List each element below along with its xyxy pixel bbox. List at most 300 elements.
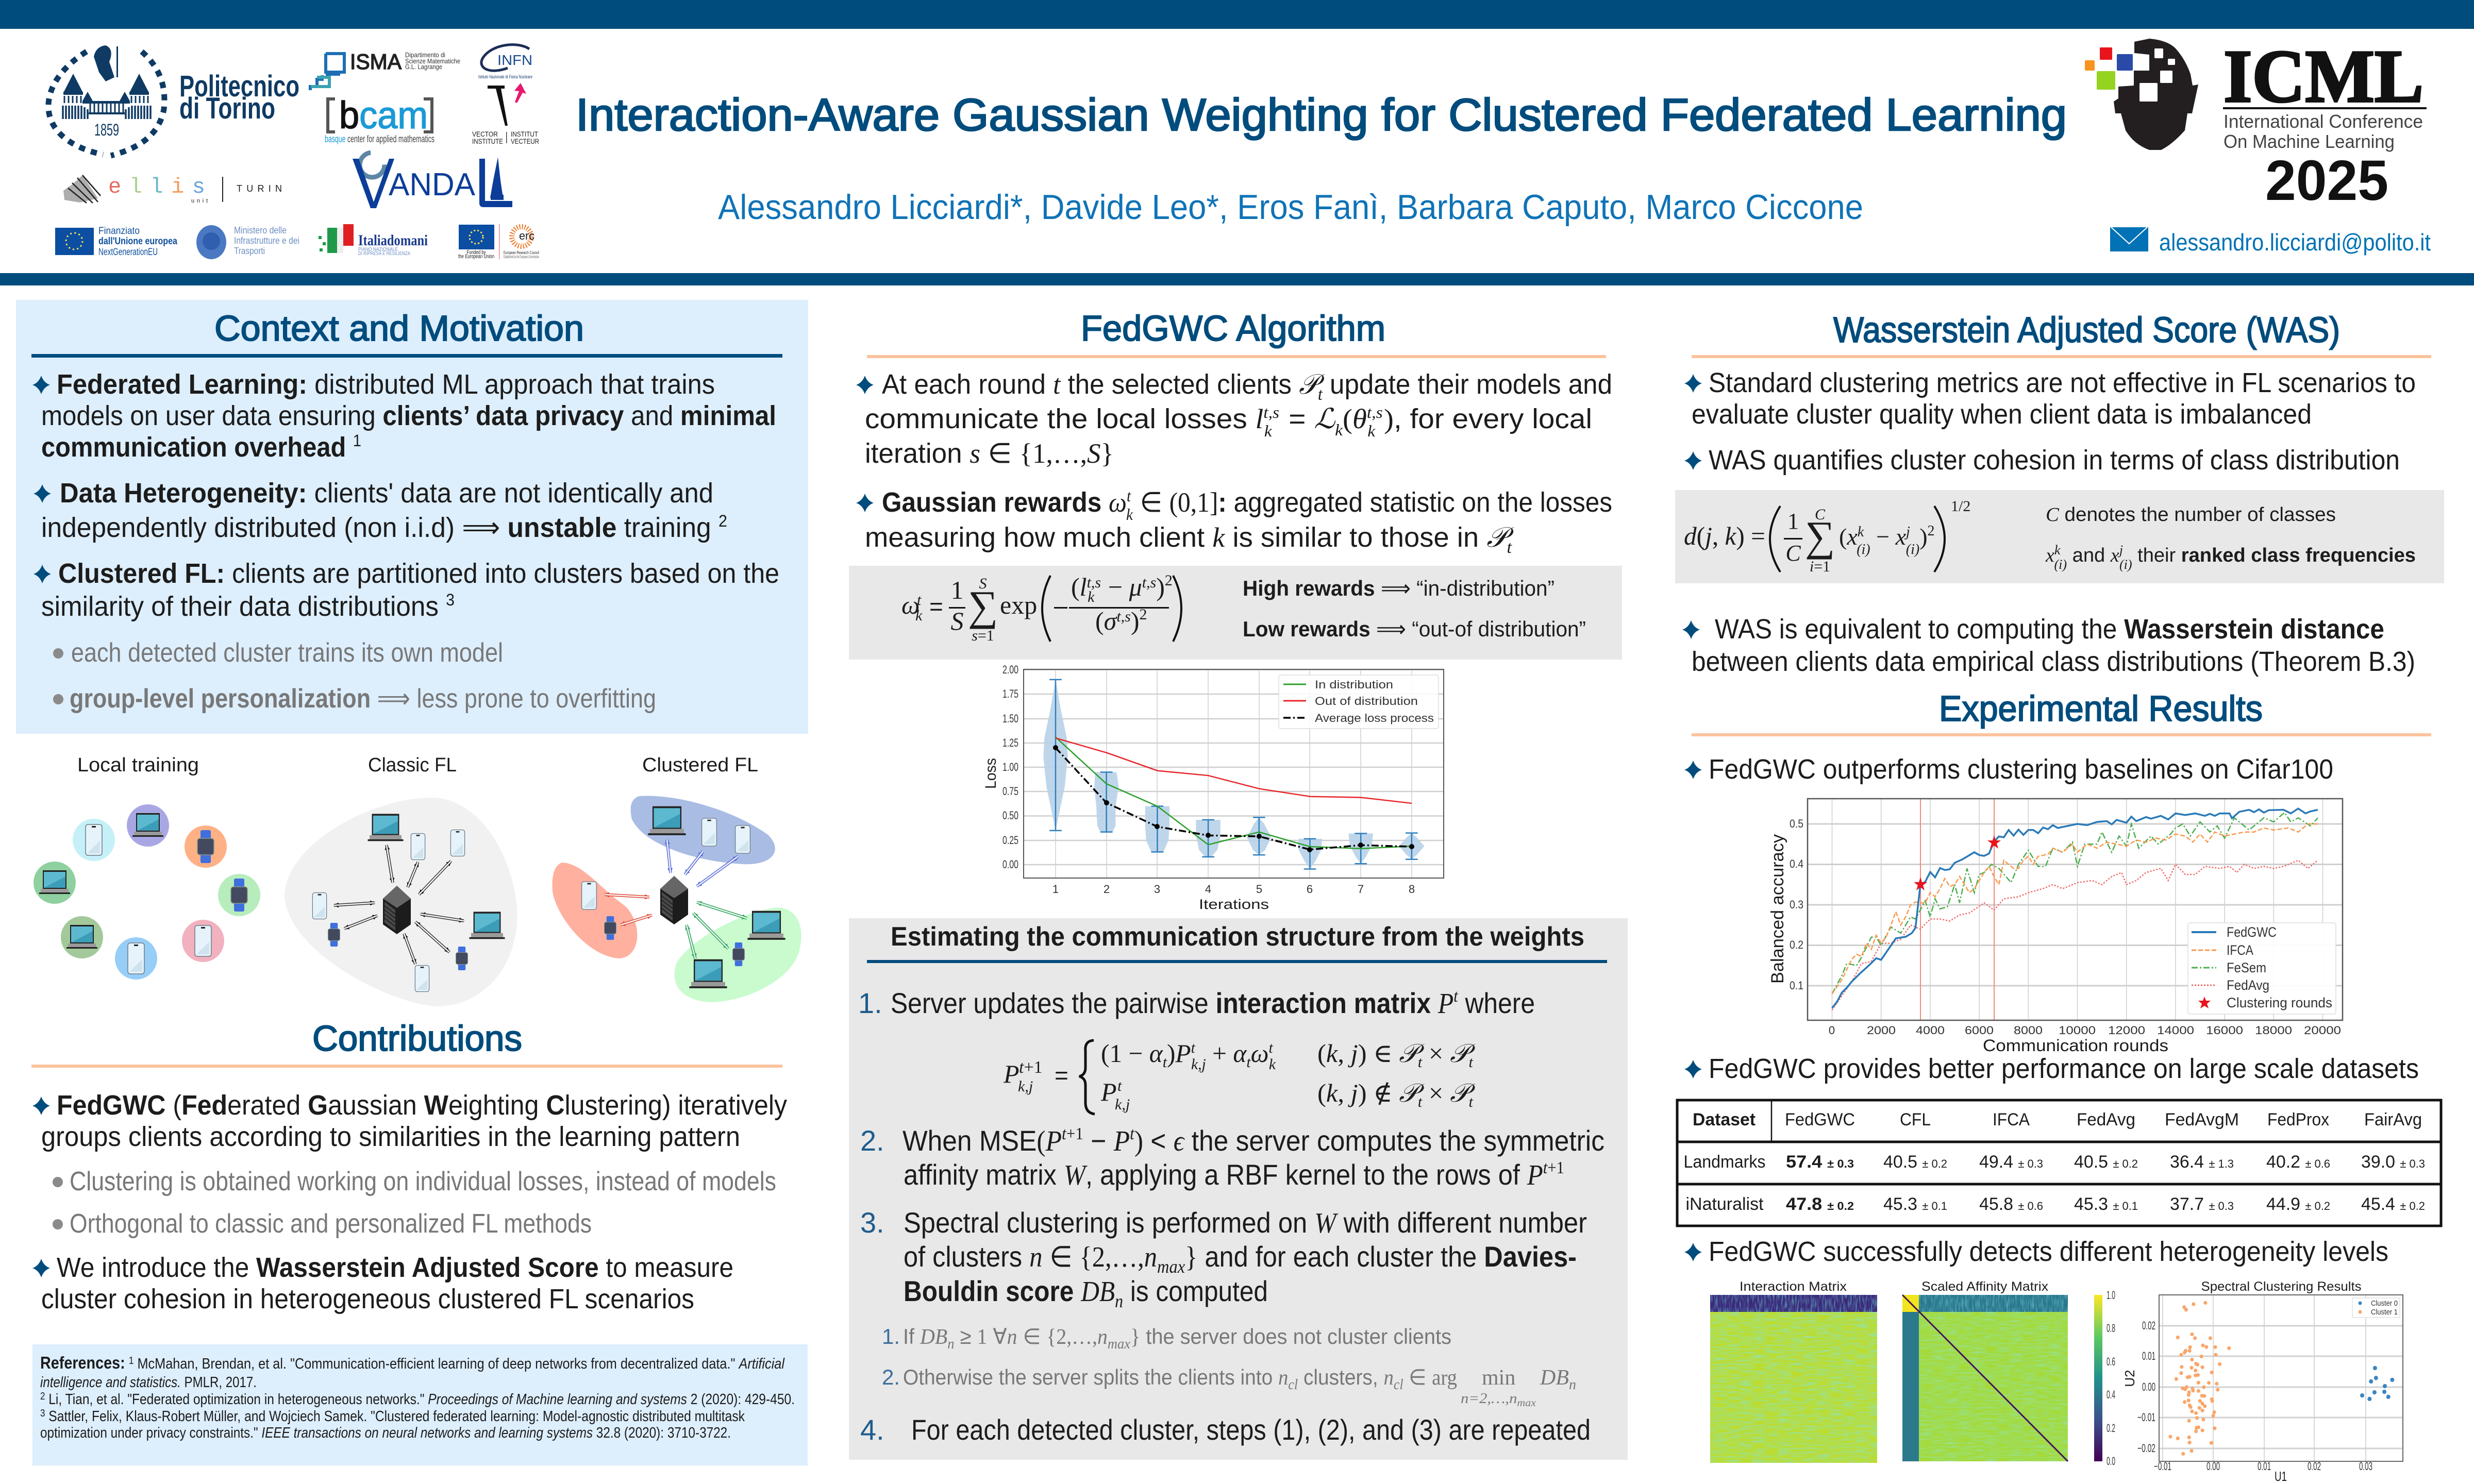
heading: Context and Motivation: Context and Motivation bbox=[214, 308, 584, 348]
chart: loss over iterations: 0.50 bbox=[1002, 809, 1018, 822]
step 2: P bbox=[1113, 1125, 1130, 1157]
chart: balanced accuracy: 2000 bbox=[1867, 1024, 1896, 1037]
chart: spectral clustering results: 0.00 bbox=[2142, 1380, 2155, 1393]
chart: loss over iterations: 1 bbox=[1052, 883, 1059, 896]
panel: references: Sattler, Felix, Klaus-Robert Müller, and Wojciech Samek. "Clustered federated learning: Model-agnostic distributed multitask bbox=[45, 1408, 745, 1425]
step 3: of clusters n ∈ {2,…,n bbox=[904, 1240, 1159, 1273]
formula: interaction matrix update: t bbox=[1117, 1077, 1122, 1094]
text: Data Heterogeneity: 2 bbox=[718, 512, 727, 530]
formula: interaction matrix update: t bbox=[1163, 1054, 1167, 1071]
logo: DISMA: ISMA bbox=[350, 49, 402, 74]
formula: interaction matrix update: k,j bbox=[1115, 1096, 1130, 1113]
formula: interaction matrix update: α bbox=[1233, 1039, 1247, 1068]
text: FedGWC algorithm bullets: t,s bbox=[1367, 403, 1383, 421]
header row: FairAvg bbox=[2364, 1110, 2422, 1129]
chart: balanced accuracy: 8000 bbox=[2014, 1024, 2043, 1037]
sub-step 2: max bbox=[1517, 1397, 1536, 1409]
step 3: Bouldin score DB bbox=[904, 1275, 1119, 1308]
logo: ellis unit Turin: e l l i s bbox=[108, 175, 205, 199]
row: Landmarks: Landmarks bbox=[1683, 1152, 1766, 1172]
formula: omega bbox=[901, 572, 1181, 644]
formula: omega: S bbox=[950, 606, 964, 635]
diagram: Local training: Local training bbox=[77, 754, 199, 776]
formula: d(j,k) bbox=[1684, 498, 1970, 575]
text: FedGWC algorithm bullets: measuring how much client k is similar to those in 𝒫 bbox=[865, 522, 1507, 553]
formula: interaction matrix update: t bbox=[1469, 1054, 1474, 1071]
sub-step 1 bbox=[882, 1324, 1451, 1352]
formula: d(j,k): k bbox=[1858, 524, 1864, 540]
legend: IFCA bbox=[2227, 942, 2253, 958]
formula: interaction matrix update: (k, j) ∉ 𝒫 bbox=[1317, 1078, 1417, 1107]
row: Landmarks: 40.5 ± 0.2 bbox=[2074, 1152, 2138, 1172]
chart: interaction matrix: Interaction Matrix bbox=[1740, 1279, 1847, 1294]
text: High rewards: High rewards ⟹ “in-distribution” bbox=[1243, 576, 1554, 600]
text: FedGWC algorithm bullets: (0,1]: aggregated statistic on the losses bbox=[1169, 487, 1647, 518]
chart: spectral clustering results: −0.02 bbox=[2137, 1442, 2155, 1455]
formula: interaction matrix update: t+1 bbox=[1019, 1058, 1043, 1077]
step 2: t+1 bbox=[1062, 1124, 1085, 1143]
formula: interaction matrix update: k,j bbox=[1191, 1056, 1206, 1073]
sub-step 1: the server does not cluster clients bbox=[1146, 1324, 1469, 1348]
formula: interaction matrix update: = bbox=[1055, 1062, 1068, 1089]
text: FedGWC algorithm bullets bbox=[856, 369, 1612, 557]
step 2: t+1 bbox=[1543, 1158, 1566, 1177]
header band bottom bbox=[0, 273, 2474, 285]
colorbar bbox=[2094, 1289, 2115, 1468]
formula: omega: ) bbox=[1131, 606, 1139, 635]
legend: Average loss process bbox=[1315, 712, 1434, 724]
chart: balanced accuracy bbox=[1768, 799, 2343, 1055]
chart: spectral clustering results: 0.01 bbox=[2258, 1460, 2271, 1473]
formula: omega: t,s bbox=[1142, 574, 1156, 591]
text: WAS equivalence bbox=[1682, 614, 2415, 677]
formula: interaction matrix update: (k, j) ∈ 𝒫 bbox=[1317, 1039, 1417, 1068]
logo: ERC EU: erc bbox=[519, 229, 534, 242]
formula: d(j,k): (i) bbox=[1906, 542, 1919, 558]
logo: VANDAL: ANDA bbox=[389, 167, 476, 203]
row: iNaturalist: 45.3 ± 0.1 bbox=[2074, 1194, 2138, 1214]
logo: DISMA: G.L. Lagrange bbox=[405, 63, 442, 71]
colorbar: 1.0 bbox=[2107, 1289, 2115, 1302]
colorbar: 0.0 bbox=[2107, 1455, 2115, 1468]
chart: spectral clustering results: 0.02 bbox=[2308, 1460, 2321, 1473]
panel: Estimating the communication structure bbox=[849, 918, 1628, 1460]
formula: d(j,k): (i) bbox=[1857, 542, 1870, 558]
formula: interaction matrix update bbox=[1003, 1039, 1476, 1114]
sub-step 2: DB bbox=[1540, 1366, 1569, 1390]
formula: d(j,k): i=1 bbox=[1810, 558, 1830, 575]
row: iNaturalist: 47.8 ± 0.2 bbox=[1786, 1194, 1854, 1214]
logo: Vector Institute: VECTEUR bbox=[511, 137, 539, 145]
formula: omega: 1 bbox=[950, 576, 964, 604]
formula: interaction matrix update: P bbox=[1100, 1077, 1117, 1106]
text: WAS bullets bbox=[1684, 367, 2416, 476]
logo: Ministero delle Infrastrutture: Ministero delle bbox=[234, 225, 287, 235]
panel: references: 2 bbox=[40, 1391, 45, 1402]
formula: omega: ) bbox=[1156, 572, 1165, 601]
logo: ICML 2025: International Conference bbox=[2224, 111, 2423, 132]
panel: references: Li, Tian, et al. "Federated optimization in heterogeneous networks." bbox=[45, 1391, 428, 1408]
email: alessandro.licciardi@polito.it bbox=[2159, 229, 2431, 256]
formula: interaction matrix update: P bbox=[1175, 1039, 1191, 1068]
logo: Vector Institute: INSTITUT bbox=[511, 130, 538, 138]
panel: references: Artificial bbox=[738, 1356, 785, 1372]
diagram: Classic FL: Classic FL bbox=[368, 754, 457, 776]
header row: FedAvgM bbox=[2165, 1110, 2239, 1129]
sub-step 2: min bbox=[1482, 1366, 1515, 1390]
text: ranked class frequencies: and bbox=[2067, 545, 2111, 566]
logo: Italiadomani: DI RIPRESA E RESILIENZA bbox=[358, 251, 410, 257]
text: WAS equivalence: WAS is equivalent to computing the Wasserstein distance bbox=[1715, 614, 2384, 645]
text: FedGWC algorithm bullets: communicate the local losses l bbox=[865, 403, 1263, 434]
diagram: Classic FL bbox=[285, 754, 517, 1006]
chart: spectral clustering results: −0.01 bbox=[2137, 1411, 2155, 1424]
text: FedGWC algorithm bullets: t bbox=[1127, 486, 1131, 505]
text: FedGWC algorithm bullets: At each round t the selected clients 𝒫 bbox=[882, 369, 1319, 400]
panel: references: 1 bbox=[129, 1355, 133, 1367]
logo: Italiadomani: Italiadomani bbox=[358, 232, 428, 249]
chart: balanced accuracy: 14000 bbox=[2157, 1024, 2194, 1037]
panel: references bbox=[32, 1344, 808, 1465]
formula: omega: = bbox=[929, 593, 943, 620]
text: ranked class frequencies: their bbox=[2132, 545, 2181, 566]
text: Data Heterogeneity: independently distributed (non i.i.d) ⟹ unstable training bbox=[41, 512, 716, 543]
sub-step 1: } bbox=[1130, 1325, 1140, 1349]
text: cluster sub-bullets: each detected cluster trains its own model bbox=[71, 638, 503, 668]
formula: interaction matrix update: × bbox=[1422, 1039, 1450, 1068]
formula: omega: S bbox=[979, 575, 987, 592]
chart: balanced accuracy: 0.5 bbox=[1790, 817, 1803, 830]
sub-step 2: cl bbox=[1288, 1377, 1298, 1393]
text: FedGWC algorithm bullets: iteration s ∈ {1,…,S} bbox=[865, 438, 1114, 469]
chart: balanced accuracy: 4000 bbox=[1916, 1024, 1945, 1037]
formula: interaction matrix update: P bbox=[1003, 1059, 1019, 1088]
logo: Politecnico di Torino: 1859 bbox=[94, 121, 119, 139]
header row: CFL bbox=[1900, 1110, 1931, 1129]
legend bbox=[2352, 1298, 2400, 1318]
formula: omega: ∑ bbox=[968, 582, 998, 629]
legend: In distribution bbox=[1315, 678, 1393, 691]
chart: spectral clustering results: 0.00 bbox=[2206, 1460, 2220, 1473]
logo: ICML 2025 bbox=[2085, 35, 2427, 212]
chart: loss over iterations: 0.00 bbox=[1002, 858, 1018, 871]
formula: interaction matrix update: t bbox=[1418, 1093, 1423, 1110]
text: FedGWC algorithm bullets: t bbox=[1318, 385, 1323, 404]
row: Landmarks: 40.2 ± 0.6 bbox=[2266, 1152, 2330, 1172]
table: results bbox=[1677, 1100, 2441, 1226]
logo: EU NextGenerationEU: dall'Unione europea bbox=[98, 236, 177, 247]
text: WAS bullets: Standard clustering metrics are not effective in FL scenarios to bbox=[1709, 367, 2416, 398]
text: contributions list bbox=[32, 1090, 787, 1314]
step 1: where bbox=[1458, 987, 1535, 1019]
text: FedGWC algorithm bullets: k bbox=[1335, 420, 1343, 439]
step 2 bbox=[860, 1124, 1604, 1191]
logo: bcam: basque center for applied mathematics bbox=[325, 134, 434, 145]
step 2: < ϵ the server computes the symmetric bbox=[1151, 1124, 1641, 1157]
row: iNaturalist: 45.4 ± 0.2 bbox=[2361, 1194, 2425, 1214]
chart: balanced accuracy: 0 bbox=[1829, 1024, 1835, 1037]
row: iNaturalist: 45.3 ± 0.1 bbox=[1883, 1194, 1947, 1214]
logo: Italiadomani bbox=[319, 224, 428, 257]
formula: d(j,k): 1 bbox=[1787, 509, 1799, 534]
formula: d(j,k): 1/2 bbox=[1951, 498, 1970, 515]
logo: Politecnico di Torino: di Torino bbox=[179, 92, 275, 125]
step 2: − bbox=[1083, 1124, 1114, 1157]
chart: spectral clustering results bbox=[2122, 1279, 2403, 1484]
text: FedGWC algorithm bullets: , for every local bbox=[1394, 403, 1582, 434]
formula: d(j,k): ∑ bbox=[1805, 513, 1835, 560]
logo: ERC EU: European Research Council bbox=[504, 250, 539, 255]
step 1: Server updates the pairwise interaction matrix P bbox=[891, 987, 1458, 1020]
step 2: affinity matrix W, applying a RBF kernel to the rows of P bbox=[904, 1158, 1567, 1191]
sub-step 2: cl bbox=[1394, 1377, 1403, 1393]
sub-step 1: 1. bbox=[882, 1324, 900, 1348]
sub-step 2: Otherwise the server splits the clients into n bbox=[903, 1365, 1302, 1390]
formula: interaction matrix update: ω bbox=[1251, 1039, 1268, 1068]
logo: EU NextGenerationEU bbox=[55, 226, 177, 258]
header row: FedGWC bbox=[1785, 1110, 1855, 1129]
text: cluster sub-bullets bbox=[53, 638, 656, 714]
logo: ERC EU: Funded by bbox=[467, 249, 486, 256]
logo: Italiadomani: PIANO NAZIONALE bbox=[358, 247, 398, 252]
sub-step 2: n bbox=[1383, 1366, 1394, 1390]
formula: d(j,k): − bbox=[1870, 524, 1896, 550]
formula: d(j,k): j bbox=[1904, 524, 1910, 540]
sub-step 2: n bbox=[1569, 1377, 1576, 1393]
chart: scaled affinity matrix bbox=[1902, 1279, 2068, 1461]
step 1: 1. bbox=[858, 987, 882, 1019]
sub-step 2: 2. bbox=[882, 1365, 900, 1389]
header row: FedAvg bbox=[2077, 1110, 2135, 1129]
step 4: For each detected cluster, steps (1), (2), and (3) are repeated bbox=[911, 1413, 1591, 1446]
logo: INFN bbox=[478, 45, 532, 79]
formula: interaction matrix update: 𝒫 bbox=[1450, 1078, 1476, 1107]
formula: d(j,k): x bbox=[1895, 524, 1907, 550]
chart: balanced accuracy: 10000 bbox=[2059, 1024, 2096, 1037]
chart: loss over iterations: 1.75 bbox=[1002, 687, 1018, 700]
text: FedGWC algorithm bullets: k bbox=[1367, 421, 1376, 440]
text: FedGWC algorithm bullets: update their models and bbox=[1323, 369, 1612, 400]
text: FedGWC algorithm bullets: = bbox=[1280, 403, 1314, 434]
chart: balanced accuracy: 20000 bbox=[2304, 1024, 2341, 1037]
chart: interaction matrix bbox=[1710, 1279, 1877, 1463]
logo: VANDAL bbox=[353, 153, 512, 208]
text: ranked class frequencies: k bbox=[2054, 543, 2061, 558]
formula: omega: t bbox=[917, 592, 922, 609]
text: Federated Learning: 1 bbox=[353, 431, 361, 450]
header row: FedProx bbox=[2267, 1110, 2329, 1129]
chart: spectral clustering results: 0.02 bbox=[2142, 1319, 2155, 1332]
formula: interaction matrix update: t bbox=[1418, 1054, 1423, 1071]
text: WAS bullets: WAS quantifies cluster cohesion in terms of class distribution bbox=[1709, 445, 2400, 476]
text: FedGWC algorithm bullets: ∈ bbox=[1133, 487, 1169, 518]
chart: loss over iterations: 6 bbox=[1307, 883, 1313, 896]
formula: omega: ω bbox=[901, 591, 920, 619]
chart: balanced accuracy: 0.4 bbox=[1790, 857, 1803, 870]
row: Landmarks: 57.4 ± 0.3 bbox=[1786, 1152, 1854, 1172]
formula: omega: μ bbox=[1129, 572, 1142, 601]
text: large scale: FedGWC provides better performance on large scale datasets bbox=[1709, 1053, 2419, 1084]
chart: loss over iterations: 2.00 bbox=[1002, 663, 1018, 676]
sub-step 2: clusters, bbox=[1298, 1365, 1383, 1389]
chart: balanced accuracy: 12000 bbox=[2108, 1024, 2145, 1037]
text: contributions list: Clustering is obtained working on individual losses, instead of models bbox=[70, 1167, 776, 1196]
chart: loss over iterations: Iterations bbox=[1199, 897, 1269, 912]
text: ranked class frequencies: (i) bbox=[2119, 557, 2132, 572]
logo: EU NextGenerationEU: Finanziato bbox=[98, 226, 140, 237]
step 3: n bbox=[1115, 1291, 1123, 1311]
logo: DISMA: Dipartimento di bbox=[405, 51, 445, 59]
logo: ellis unit Turin bbox=[63, 175, 282, 204]
text: contributions list: We introduce the Wasserstein Adjusted Score to measure bbox=[57, 1252, 733, 1283]
formula: d(j,k): C bbox=[1785, 541, 1801, 566]
formula: d(j,k): 2 bbox=[1928, 523, 1935, 539]
text: Data Heterogeneity bbox=[34, 478, 727, 543]
text: Federated Learning: Federated Learning: distributed ML approach that trains bbox=[57, 369, 715, 400]
sub-step 2: ∈ bbox=[1403, 1365, 1432, 1389]
title: Interaction-Aware Gaussian Weighting for Clustered Federated Learning bbox=[576, 89, 2067, 140]
logo: EU NextGenerationEU: NextGenerationEU bbox=[98, 247, 158, 258]
legend: FedAvg bbox=[2227, 977, 2269, 993]
formula: omega: (σ bbox=[1095, 606, 1116, 635]
legend: FedGWC bbox=[2227, 924, 2277, 940]
logo: ellis unit Turin: TURIN bbox=[237, 183, 282, 194]
chart: loss over iterations bbox=[982, 663, 1444, 912]
formula: omega: 2 bbox=[1139, 606, 1147, 623]
text: heterogeneity levels: FedGWC successfully detects different heterogeneity levels bbox=[1709, 1236, 2388, 1267]
logo: Ministero delle Infrastrutture: Trasporti bbox=[234, 246, 265, 256]
formula: interaction matrix update: t bbox=[1191, 1039, 1196, 1056]
colorbar: 0.8 bbox=[2107, 1322, 2115, 1335]
logo: Ministero delle Infrastrutture: Infrastrutture e dei bbox=[234, 235, 299, 246]
panel: Gaussian reward formula bbox=[849, 566, 1622, 660]
chart: balanced accuracy: Communication rounds bbox=[1983, 1036, 2168, 1055]
chart: balanced accuracy: Balanced accuracy bbox=[1768, 834, 1787, 984]
sub-step 1: n bbox=[947, 1336, 954, 1352]
text: FedGWC algorithm bullets: t bbox=[1507, 538, 1513, 557]
formula: omega: t,s bbox=[1087, 574, 1101, 591]
logo: ICML 2025: 2025 bbox=[2265, 149, 2388, 212]
colorbar: 0.4 bbox=[2107, 1388, 2115, 1401]
sub-step 1: ≥ bbox=[954, 1324, 977, 1348]
row: iNaturalist: 44.9 ± 0.2 bbox=[2266, 1194, 2330, 1214]
text: C denotes: C denotes the number of classes bbox=[2046, 504, 2336, 526]
panel: references: Proceedings of Machine learning and systems 2 (2020): 429-450. bbox=[428, 1391, 814, 1408]
chart: loss over iterations: 0.25 bbox=[1002, 834, 1018, 847]
chart: spectral clustering results: U1 bbox=[2275, 1469, 2287, 1484]
legend bbox=[2188, 923, 2336, 1014]
logo: ERC EU: the European Union bbox=[458, 254, 494, 260]
logo: Vector Institute: INSTITUTE bbox=[472, 137, 503, 145]
logo: DISMA bbox=[310, 49, 460, 90]
formula: omega: 2 bbox=[1165, 572, 1173, 589]
panel: Context and Motivation bbox=[16, 300, 808, 734]
formula: omega: k bbox=[915, 607, 923, 624]
row: iNaturalist: 45.8 ± 0.6 bbox=[1979, 1194, 2043, 1214]
header band top bbox=[0, 0, 2474, 29]
logo: Politecnico di Torino: Politecnico bbox=[179, 70, 299, 103]
chart: loss over iterations: 4 bbox=[1205, 883, 1211, 896]
text: Clustered FL: 3 bbox=[446, 591, 455, 609]
text: FedGWC algorithm bullets: ) bbox=[1384, 403, 1394, 434]
logo: INFN: Istituto Nazionale di Fisica Nucleare bbox=[478, 74, 532, 79]
legend bbox=[1279, 675, 1439, 729]
formula: interaction matrix update: k bbox=[1269, 1056, 1276, 1073]
logo: ellis unit Turin: unit bbox=[191, 198, 208, 204]
chart: loss over iterations: 7 bbox=[1358, 883, 1364, 896]
step 3 bbox=[860, 1206, 1587, 1311]
sub-step 2 bbox=[882, 1365, 1576, 1409]
text: ranked class frequencies: x bbox=[2110, 545, 2119, 566]
text: contributions list: groups clients according to similarities in the learning pattern bbox=[41, 1121, 740, 1152]
formula: omega: exp bbox=[1000, 591, 1037, 619]
logo: Vector Institute bbox=[472, 83, 539, 145]
text: cluster sub-bullets: group-level personalization ⟹ less prone to overfitting bbox=[70, 684, 656, 714]
chart: loss over iterations: 1.25 bbox=[1002, 736, 1018, 749]
row: Landmarks: 36.4 ± 1.3 bbox=[2170, 1152, 2234, 1172]
text: Clustered FL: similarity of their data distributions bbox=[41, 591, 460, 622]
text: ranked class frequencies: x bbox=[2045, 545, 2054, 566]
formula: d(j,k): d(j, k) = bbox=[1684, 521, 1765, 550]
header row: Dataset bbox=[1693, 1110, 1756, 1129]
colorbar: 0.6 bbox=[2107, 1355, 2115, 1368]
text: WAS bullets: evaluate cluster quality when client data is imbalanced bbox=[1692, 399, 2312, 430]
formula: interaction matrix update: 𝒫 bbox=[1450, 1039, 1476, 1068]
chart: spectral clustering results: 0.01 bbox=[2142, 1350, 2155, 1362]
text: ranked class frequencies: j bbox=[2118, 543, 2123, 558]
sub-step 2: arg bbox=[1432, 1366, 1457, 1390]
diagram: Clustered FL bbox=[553, 754, 801, 1002]
formula: interaction matrix update: ) bbox=[1167, 1039, 1175, 1068]
text: Established by the European Commission bbox=[504, 255, 539, 259]
text: FedGWC algorithm bullets: θ bbox=[1352, 403, 1367, 434]
step 4: 4. bbox=[860, 1413, 884, 1446]
logo: ERC EU bbox=[458, 224, 539, 260]
chart: balanced accuracy: 0.2 bbox=[1790, 938, 1803, 951]
text: FedGWC algorithm bullets: t,s bbox=[1263, 403, 1279, 421]
legend: Cluster 1 bbox=[2371, 1308, 2398, 1317]
chart: loss over iterations: 2 bbox=[1104, 883, 1110, 896]
chart: loss over iterations: 8 bbox=[1409, 883, 1415, 896]
row: Landmarks: 49.4 ± 0.3 bbox=[1979, 1152, 2043, 1172]
legend: FeSem bbox=[2227, 960, 2266, 975]
step 3: max bbox=[1157, 1256, 1185, 1277]
text: FedGWC algorithm bullets: k bbox=[1264, 421, 1272, 440]
logo: Vector Institute: VECTOR bbox=[472, 130, 498, 138]
row: iNaturalist: 37.7 ± 0.3 bbox=[2170, 1194, 2234, 1214]
text: outperforms: FedGWC outperforms clustering baselines on Cifar100 bbox=[1709, 754, 2333, 785]
diagram: Local training bbox=[34, 754, 260, 980]
colorbar: 0.2 bbox=[2107, 1422, 2115, 1435]
heading: FedGWC Algorithm: FedGWC Algorithm bbox=[1081, 308, 1385, 348]
text: Federated Learning bbox=[32, 369, 776, 463]
formula: interaction matrix update: + bbox=[1206, 1039, 1233, 1068]
step 2: t bbox=[1130, 1124, 1135, 1143]
formula: omega: − bbox=[1101, 572, 1129, 601]
chart: loss over iterations: 5 bbox=[1256, 883, 1262, 896]
sub-step 1: If DB bbox=[903, 1324, 949, 1349]
chart: loss over iterations: 1.50 bbox=[1002, 712, 1018, 725]
step 2: ) bbox=[1134, 1125, 1143, 1157]
chart: loss over iterations: Loss bbox=[982, 758, 999, 789]
logo: DISMA: Scienze Matematiche bbox=[405, 57, 460, 65]
step 3: is computed bbox=[1123, 1275, 1268, 1307]
chart: balanced accuracy: 0.3 bbox=[1790, 898, 1803, 911]
heading: Wasserstein Adjusted Score: Wasserstein Adjusted Score (WAS) bbox=[1833, 310, 2340, 350]
step 2: When MSE(P bbox=[902, 1124, 1063, 1157]
text: contributions list: FedGWC (Federated Gaussian Weighting Clustering) iteratively bbox=[57, 1090, 787, 1121]
logo: INFN: INFN bbox=[497, 52, 532, 68]
